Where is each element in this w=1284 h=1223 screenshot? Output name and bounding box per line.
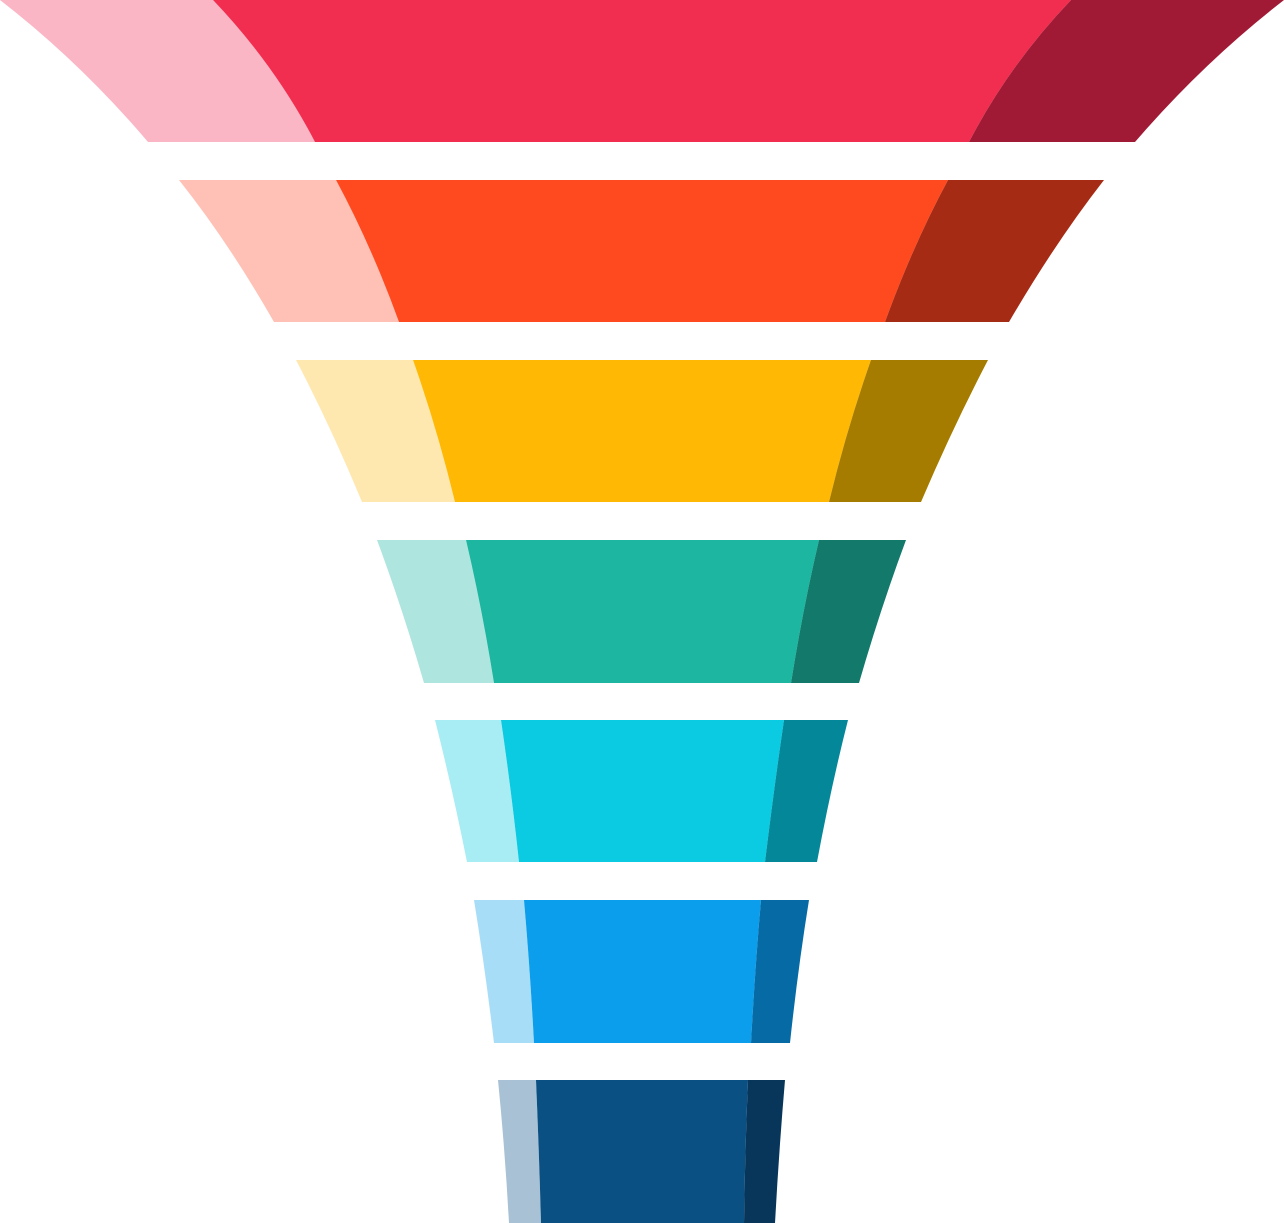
band 1 bbox=[0, 0, 1284, 142]
band 2 bbox=[179, 180, 1104, 322]
band 5 bbox=[435, 720, 848, 862]
band 4 bbox=[377, 540, 906, 683]
band 3 bbox=[296, 360, 988, 502]
band 6 bbox=[474, 900, 809, 1043]
band 7 bbox=[498, 1080, 785, 1223]
